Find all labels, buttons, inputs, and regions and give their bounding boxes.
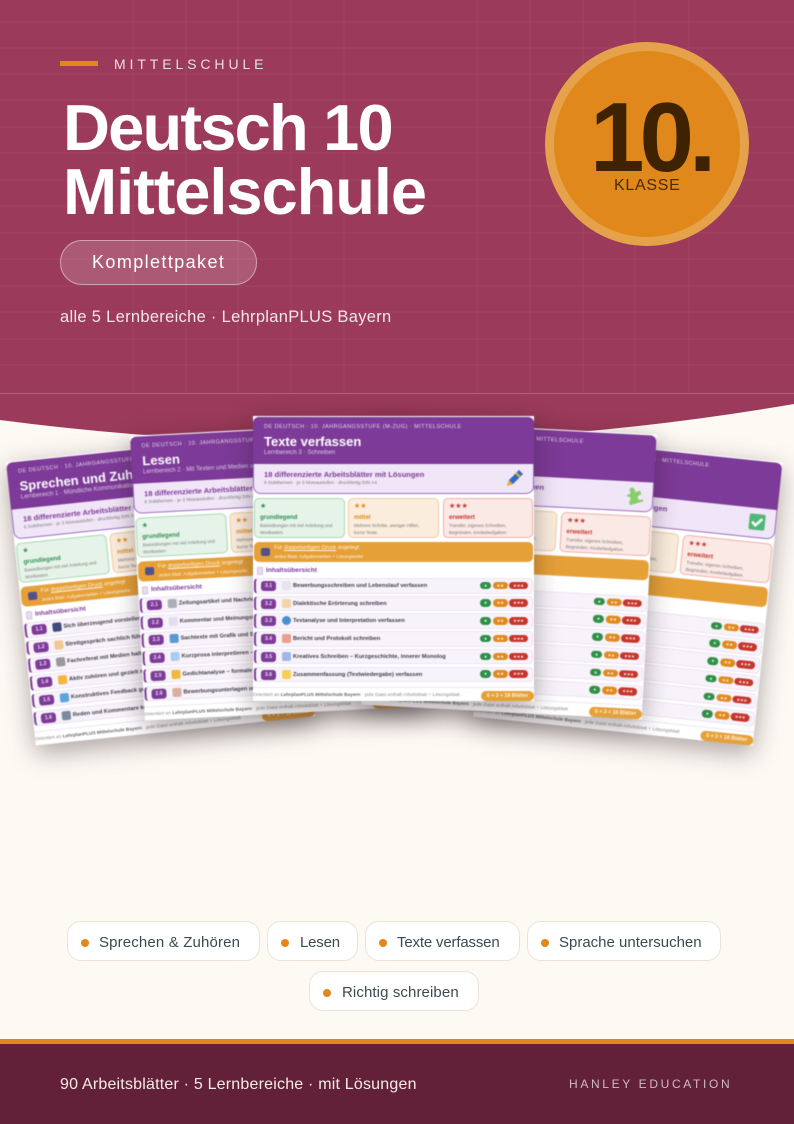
worksheet card 4: Sprache untersuchen: 6 Subthemen · je 3 Niveaustufen · druckfertig DIN A4 <box>384 486 497 497</box>
worksheet card 1: Sprechen und Zuhören: 1.1 <box>35 626 43 633</box>
worksheet card 5: Richtig schreiben: ★★ <box>721 677 729 682</box>
worksheet card 5: Richtig schreiben <box>473 433 782 745</box>
topic 3.6 <box>254 666 533 682</box>
worksheet card 5: Richtig schreiben: grundlegend <box>498 531 536 542</box>
worksheet card 1: Sprechen und Zuhören: Wortkasten. <box>25 572 49 579</box>
worksheet card 1: Sprechen und Zuhören: Fachreferat mit Medien halten <box>67 651 149 665</box>
topic 3.5: ★ <box>484 654 487 659</box>
topic 3.4: 3.4 <box>265 636 272 642</box>
topic 3.6: 3.6 <box>265 672 272 678</box>
worksheet card 4: Sprache untersuchen: ★★★ <box>623 689 634 694</box>
footer summary: 90 Arbeitsblätter · 5 Lernbereiche · mit Lösungen <box>60 1076 417 1093</box>
worksheet card 2: Lesen: 18 differenzierte Arbeitsblätter mit Lösungen <box>144 481 304 498</box>
worksheet card 5: Richtig schreiben: 5.3 <box>493 635 500 642</box>
eyebrow label: MITTELSCHULE <box>114 56 267 72</box>
worksheet card 1: Sprechen und Zuhören: 1.4 <box>41 679 49 686</box>
topic pill: Richtig schreiben <box>309 971 479 1011</box>
worksheet card 4: Sprache untersuchen: ★ <box>597 617 601 622</box>
worksheet card 4: Sprache untersuchen: ★ <box>598 599 602 604</box>
worksheet card 2: Lesen: 2.1 <box>151 602 158 608</box>
grade circle <box>545 42 749 246</box>
worksheet card 1: Sprechen und Zuhören: 1.3 <box>39 661 47 668</box>
worksheet card 4: Sprache untersuchen: ★★ <box>607 670 614 676</box>
worksheet card 1: Sprechen und Zuhören: Reden und Kommentare kritisch bewerten <box>72 700 188 718</box>
worksheet card 1: Sprechen und Zuhören: grundlegend <box>23 555 61 566</box>
level: grundlegend <box>254 498 345 538</box>
worksheet card 4: Sprache untersuchen: 4.4 <box>376 641 384 647</box>
worksheet card 4: Sprache untersuchen <box>361 420 657 720</box>
badge: Komplettpaket: Komplettpaket <box>92 252 225 272</box>
topic 3.6: ★ <box>484 671 487 676</box>
worksheet card 4: Sprache untersuchen: ★★★ <box>623 671 634 677</box>
worksheet card 5: Richtig schreiben: ★ <box>710 658 714 663</box>
footer bar <box>0 1039 794 1124</box>
topic 3.3: ★★★ <box>513 618 524 623</box>
topic 3.2: ★ <box>484 600 487 605</box>
worksheet card 1: Sprechen und Zuhören: 1.5 <box>43 696 50 703</box>
level: mittel: kurze Texte. <box>354 530 378 535</box>
worksheet card 2: Lesen: Lernbereich 2 · Mit Texten und Medien umgehen <box>143 461 276 475</box>
title: Deutsch 10 <box>63 91 392 164</box>
worksheet card 1: Sprechen und Zuhören: ★ <box>22 547 29 555</box>
worksheet card 2: Lesen: Orientiert an LehrplanPLUS Mittelschule Bayern · jede Datei enthält Arbeitsblatt + Lösungsblatt <box>144 702 351 718</box>
worksheet card 5: Richtig schreiben: ★★★ <box>736 696 747 702</box>
worksheet card 1: Sprechen und Zuhören: mittel <box>117 547 134 556</box>
level: erweitert: erweitert <box>449 514 475 521</box>
topic 3.1: ★★ <box>497 583 504 588</box>
worksheet card 2: Lesen: ★★ <box>235 517 248 525</box>
sheet count pill: 6 × 3 = 18 Blätter <box>487 693 528 699</box>
topic pill: Lesen: Lesen <box>300 934 340 951</box>
worksheet card 1: Sprechen und Zuhören: 6 × 3 = 18 Blätter <box>268 709 309 719</box>
worksheet card 5: Richtig schreiben: ★ <box>500 520 507 527</box>
worksheet card 2: Lesen: Wortkasten. <box>143 548 167 554</box>
worksheet card 4: Sprache untersuchen: ★★★ <box>627 600 638 606</box>
worksheet card 5: Richtig schreiben: ★ <box>705 711 709 716</box>
level: grundlegend: grundlegend <box>260 514 297 521</box>
topic 3.2 <box>254 596 533 611</box>
worksheet card 2: Lesen: 6 × 3 = 18 Blätter <box>378 698 420 706</box>
worksheet card 5: Richtig schreiben: 5.1 <box>496 600 504 607</box>
worksheet card 4: Sprache untersuchen: ★ <box>378 508 385 515</box>
worksheet card 5: Richtig schreiben: Orientiert an LehrplanPLUS Mittelschule Bayern · jede Datei enthält Arbeitsblatt + Lösungsblatt <box>473 708 679 735</box>
worksheet card 2: Lesen: Jedes Blatt: Aufgabenseiten + Lösungsseite <box>158 568 248 577</box>
topic 3.6: ★★★ <box>513 671 524 676</box>
level: mittel: Mehrere Schritte, weniger Hilfen, <box>354 523 420 528</box>
topic 3.1: ★★★ <box>513 583 524 588</box>
worksheet card 5: Richtig schreiben: Groß- und Kleinschreibung – Regelkunde <box>520 638 634 656</box>
contents heading: Inhaltsübersicht <box>266 567 317 574</box>
worksheet card 5: Richtig schreiben: ★★★ <box>734 714 745 720</box>
worksheet card 2: Lesen: erweitert <box>331 522 357 531</box>
topic pill: Richtig schreiben: Richtig schreiben <box>342 984 459 1001</box>
worksheet card 2: Lesen: Inhaltsübersicht <box>151 583 202 593</box>
worksheet card 4: Sprache untersuchen: ★★ <box>609 635 616 640</box>
worksheet card 4: Sprache untersuchen: ★ <box>593 687 597 692</box>
topic 3.4: Bericht und Protokoll schreiben <box>293 636 380 642</box>
grade label: KLASSE <box>614 177 680 194</box>
worksheet card 1: Sprechen und Zuhören: 18 differenzierte Arbeitsblätter mit Lösungen <box>23 498 183 524</box>
worksheet card 1: Sprechen und Zuhören: Mehrere Schritte, weniger Hilfen, <box>118 551 183 563</box>
level: grundlegend: ★ <box>260 503 266 510</box>
worksheet card 5: Richtig schreiben: 5.6 <box>487 688 495 695</box>
worksheet card 4: Sprache untersuchen: ★★★ <box>567 517 586 525</box>
worksheet card 5: Richtig schreiben: ★ <box>712 640 716 646</box>
worksheet card 5: Richtig schreiben: ★ <box>708 675 713 681</box>
publisher: HANLEY EDUCATION <box>569 1077 732 1091</box>
level: mittel: ★★ <box>354 503 367 510</box>
worksheet card 1: Sprechen und Zuhören: kurze Texte. <box>118 562 143 569</box>
topic 3.5 <box>254 649 533 664</box>
topic 3.3: ★ <box>484 618 487 623</box>
worksheet card 1: Sprechen und Zuhören: 1.2 <box>37 644 45 650</box>
worksheet card 2: Lesen: ★ <box>142 522 148 530</box>
level: grundlegend: Wortkasten. <box>260 530 284 535</box>
worksheet card 5: Richtig schreiben: 5.2 <box>494 618 502 624</box>
worksheet card 2: Lesen: Bewerbungsunterlagen und Formulare <box>183 684 289 695</box>
worksheet card 5: Richtig schreiben: erweitert <box>686 551 713 560</box>
worksheet card 2: Lesen: Kurzprosa interpretieren – Kurzgeschichten <box>181 647 301 660</box>
worksheet card 5: Richtig schreiben: Lernbereich 5 · Rechtschreibung <box>509 467 599 483</box>
worksheet card 5: Richtig schreiben: mittel <box>592 541 609 549</box>
worksheet card 1: Sprechen und Zuhören: Jedes Blatt: Aufgabenseiten + Lösungsseite <box>41 587 131 602</box>
topic 3.2: 3.2 <box>265 601 272 607</box>
worksheet card 1: Sprechen und Zuhören: Inhaltsübersicht <box>35 605 86 618</box>
topic pill: Sprechen & Zuhören <box>67 921 260 961</box>
worksheet card 4: Sprache untersuchen: ★★★ <box>625 636 636 641</box>
worksheet card 4: Sprache untersuchen: Wortschatz und Fachsprache – Herkunft <box>405 642 515 654</box>
worksheet card 1: Sprechen und Zuhören: Sich überzeugend vorstellen <box>63 616 142 630</box>
worksheet card 5: Richtig schreiben: 6 Subthemen · je 3 Niveaustufen · druckfertig DIN A4 <box>506 498 619 515</box>
topic pill: Texte verfassen <box>365 921 520 961</box>
worksheet card 4: Sprache untersuchen: 4.1 <box>379 588 387 594</box>
topic 3.2: ★★ <box>497 600 504 605</box>
worksheet card 5: Richtig schreiben: ★★★ <box>738 678 749 685</box>
topic 3.3 <box>254 613 533 629</box>
worksheet card 2: Lesen: Für doppelseitigen Druck angelegt <box>158 559 243 570</box>
worksheet card 5: Richtig schreiben: ★ <box>714 623 718 628</box>
worksheet card 4: Sprache untersuchen: 4.2 <box>378 605 386 612</box>
topic 3.4: ★★★ <box>513 636 524 641</box>
worksheet card 4: Sprache untersuchen: 4.3 <box>377 623 385 629</box>
hero background <box>0 0 794 436</box>
print notice <box>254 542 533 562</box>
topic 3.2: ★★★ <box>513 600 524 605</box>
card footer: Orientiert an LehrplanPLUS Mittelschule Bayern · jede Datei enthält Arbeitsblatt + Lösungsblatt <box>253 693 460 698</box>
topic 3.5: Kreatives Schreiben – Kurzgeschichte, innerer Monolog <box>293 654 446 660</box>
worksheet card 1: Sprechen und Zuhören: Konstruktives Feedback geben <box>71 685 156 700</box>
worksheet card 2: Lesen: Gedichtanalyse – formale Mittel <box>182 667 269 677</box>
topic 3.5: 3.5 <box>265 654 272 660</box>
worksheet card 2: Lesen: 2.2 <box>152 619 159 626</box>
card summary box: 6 Subthemen · je 3 Niveaustufen · druckfertig DIN A4 <box>264 481 377 486</box>
accent bar <box>60 61 98 66</box>
worksheet card 1: Sprechen und Zuhören: Lernbereich 1 · Mündliche Kommunikation <box>20 482 136 501</box>
topic 3.3: Textanalyse und Interpretation verfassen <box>293 618 405 624</box>
worksheet card 4: Sprache untersuchen: DE DEUTSCH · 10. JAHRGANGSSTUFE (M-ZUG) · MITTELSCHULE <box>387 429 584 445</box>
card title: Texte verfassen <box>264 434 361 449</box>
level: erweitert: ★★★ <box>449 503 468 510</box>
worksheet card 2: Lesen: grundlegend <box>142 532 180 540</box>
worksheet card 4: Sprache untersuchen: ★ <box>595 652 599 657</box>
topic 3.1: ★ <box>484 583 487 588</box>
card summary box: 18 differenzierte Arbeitsblätter mit Lösungen <box>264 470 424 479</box>
worksheet card 5: Richtig schreiben: 18 differenzierte Arbeitsblätter mit Lösungen <box>507 487 667 513</box>
worksheet card 4: Sprache untersuchen: erweitert <box>567 528 593 537</box>
worksheet card 2: Lesen: Kommentar und Meinungstexte verstehen <box>180 612 294 624</box>
worksheet card 1: Sprechen und Zuhören: 1.6 <box>45 714 52 721</box>
worksheet card 2: Lesen: 2.3 <box>152 637 160 643</box>
worksheet card 5: Richtig schreiben: ★★ <box>593 530 606 538</box>
worksheet card 4: Sprache untersuchen: 4.5 <box>376 658 383 665</box>
worksheet card 4: Sprache untersuchen: ★★ <box>608 653 615 658</box>
topic pill: Lesen <box>267 921 358 961</box>
worksheet card 5: Richtig schreiben: 5.4 <box>491 653 498 659</box>
worksheet card 5: Richtig schreiben: ★★ <box>725 642 733 647</box>
worksheet card 5: Richtig schreiben: 6 × 3 = 18 Blätter <box>706 733 747 743</box>
card header <box>253 417 534 464</box>
worksheet card 4: Sprache untersuchen: mittel <box>472 523 489 531</box>
worksheet card 4: Sprache untersuchen: 4.6 <box>375 676 382 682</box>
worksheet card 2: Lesen: kurze Texte. <box>237 543 261 549</box>
topic 3.2: Dialektische Erörterung schreiben <box>293 601 387 607</box>
level: mittel: mittel <box>354 514 371 521</box>
worksheet card 2: Lesen: 2.6 <box>155 690 163 697</box>
worksheet card 2: Lesen: ★★★ <box>330 512 349 520</box>
worksheet card 1: Sprechen und Zuhören: 6 Subthemen · je 3 Niveaustufen · druckfertig DIN A4 <box>24 514 137 530</box>
worksheet card 4: Sprache untersuchen: Mehrere Schritte, weniger Hilfen, <box>471 532 537 541</box>
worksheet card 1: Sprechen und Zuhören: ★★★ <box>210 526 229 535</box>
worksheet card 1: Sprechen und Zuhören: Streitgespräch sachlich führen <box>65 633 150 647</box>
worksheet card 1: Sprechen und Zuhören: erweitert <box>211 536 238 546</box>
subtitle: alle 5 Lernbereiche · LehrplanPLUS Bayern <box>60 308 392 326</box>
worksheet card 5: Richtig schreiben: ★★★ <box>740 661 751 667</box>
topic 3.6: ★★ <box>497 671 504 676</box>
topic pill: Texte verfassen: Texte verfassen <box>397 934 500 951</box>
worksheet card 4: Sprache untersuchen: ★ <box>594 670 598 675</box>
worksheet card 4: Sprache untersuchen: Begründen, Knobelaufgaben. <box>566 544 625 552</box>
level: erweitert: Begründen, Knobelaufgaben. <box>449 530 508 535</box>
worksheet card 2: Lesen <box>130 421 426 721</box>
worksheet card 5: Richtig schreiben: ★★ <box>727 624 735 630</box>
topic 3.1: Bewerbungsschreiben und Lebenslauf verfassen <box>293 583 427 589</box>
grade number: 10. <box>590 82 711 192</box>
worksheet card 4: Sprache untersuchen: kurze Texte. <box>471 539 495 545</box>
worksheet card 4: Sprache untersuchen: Transfer, eigenes Schreiben, <box>566 537 624 545</box>
worksheet card 4: Sprache untersuchen: 18 differenzierte Arbeitsblätter mit Lösungen <box>384 475 545 492</box>
worksheet card 5: Richtig schreiben: Begründen, Knobelaufgaben. <box>685 566 744 577</box>
worksheet card 2: Lesen: 2.4 <box>153 655 161 661</box>
topic 3.1 <box>254 578 533 594</box>
worksheet card 2: Lesen: 2.5 <box>154 672 162 679</box>
topic 3.3: 3.3 <box>265 618 272 624</box>
worksheet card 1: Sprechen und Zuhören: Begründen, Knobelaufgaben. <box>213 548 272 559</box>
worksheet card 1: Sprechen und Zuhören: Basisübungen mit viel Anleitung und <box>24 560 97 573</box>
worksheet card 4: Sprache untersuchen: ★★★ <box>626 618 637 624</box>
worksheet card 5: Richtig schreiben: ★★ <box>718 712 725 718</box>
worksheet card 5: Richtig schreiben: kurze Texte. <box>591 556 615 564</box>
card eyebrow: DE DEUTSCH · 10. JAHRGANGSSTUFE (M-ZUG) · MITTELSCHULE <box>264 424 462 430</box>
worksheet card 4: Sprache untersuchen: 6 × 3 = 18 Blätter <box>595 709 637 717</box>
title: Mittelschule <box>63 155 426 228</box>
worksheet card 5: Richtig schreiben: ★★★ <box>741 643 753 649</box>
worksheet card 4: Sprache untersuchen: ★★ <box>611 600 618 605</box>
worksheet card 2: Lesen: DE DEUTSCH · 10. JAHRGANGSSTUFE (M-ZUG) · MITTELSCHULE <box>141 433 339 449</box>
worksheet card 1: Sprechen und Zuhören: Orientiert an LehrplanPLUS Mittelschule Bayern · jede Datei enthält Arbeitsblatt + Lösungsblatt <box>35 716 241 742</box>
worksheet card 4: Sprache untersuchen: Sprache untersuchen <box>386 439 519 461</box>
worksheet card 5: Richtig schreiben: 5.5 <box>489 670 497 677</box>
worksheet card 4: Sprache untersuchen: Sprachliche Mittel untersuchen (Funktion) <box>405 625 521 637</box>
worksheet card 2: Lesen: 6 Subthemen · je 3 Niveaustufen · druckfertig DIN A4 <box>144 494 258 505</box>
topic 3.5: ★★ <box>497 654 504 659</box>
level: erweitert: Transfer, eigenes Schreiben, <box>449 523 506 528</box>
worksheet card 4: Sprache untersuchen: Orientiert an LehrplanPLUS Mittelschule Bayern · jede Datei enthält Arbeitsblatt + Lösungsblatt <box>362 697 568 713</box>
badge: Komplettpaket <box>60 240 257 285</box>
worksheet card 4: Sprache untersuchen: ★ <box>596 634 600 639</box>
topic 3.4 <box>254 631 533 647</box>
worksheet card 4: Sprache untersuchen: grundlegend <box>378 519 416 527</box>
topic 3.4: ★ <box>484 636 487 641</box>
worksheet card 2: Lesen: Basisübungen mit viel Anleitung und <box>143 539 215 547</box>
worksheet card 2: Lesen: mittel <box>236 528 253 536</box>
worksheet card 5: Richtig schreiben: ★ <box>707 693 711 698</box>
level: grundlegend: Basisübungen mit viel Anleitung und <box>260 523 332 528</box>
worksheet card 5: Richtig schreiben: DE DEUTSCH · 10. JAHRGANGSSTUFE (M-ZUG) · MITTELSCHULE <box>512 442 709 468</box>
worksheet card 5: Richtig schreiben: Mehrere Schritte, weniger Hilfen, <box>591 550 657 561</box>
topic 3.5: ★★★ <box>513 654 524 659</box>
level: erweitert <box>443 498 533 538</box>
worksheet card 1: Sprechen und Zuhören <box>6 433 315 745</box>
topic pill: Sprache untersuchen <box>527 921 721 961</box>
worksheet card 1: Sprechen und Zuhören: DE DEUTSCH · 10. JAHRGANGSSTUFE (M-ZUG) · MITTELSCHULE <box>18 448 215 475</box>
title <box>63 91 426 228</box>
topic 3.1: 3.1 <box>265 583 272 589</box>
worksheet card 4: Sprache untersuchen: Lernbereich 4 · Sprachgebrauch <box>385 454 474 465</box>
worksheet card 5: Richtig schreiben: ★★★ <box>743 626 754 632</box>
worksheet card 4: Sprache untersuchen: ★★ <box>472 512 485 520</box>
worksheet card 1: Sprechen und Zuhören: Transfer, eigenes Schreiben, <box>212 542 270 553</box>
worksheet card 5: Richtig schreiben: ★★★ <box>688 540 707 549</box>
worksheet card 5: Richtig schreiben: Richtig schreiben <box>510 452 620 478</box>
worksheet card 4: Sprache untersuchen: ★★★ <box>624 653 635 659</box>
worksheet card 1: Sprechen und Zuhören: ★★ <box>116 537 129 545</box>
topic pill: Sprache untersuchen: Sprache untersuchen <box>559 934 702 951</box>
worksheet card 2: Lesen: Mehrere Schritte, weniger Hilfen, <box>236 534 302 543</box>
worksheet card 2: Lesen: Lesen <box>142 451 180 468</box>
card summary box <box>253 464 534 494</box>
level: mittel <box>348 498 439 538</box>
worksheet card 1: Sprechen und Zuhören: Aktiv zuhören und gezielt nachfragen <box>69 666 171 683</box>
worksheet card 5: Richtig schreiben: ★★ <box>723 659 731 665</box>
topic 3.6: Zusammenfassung (Textwiedergabe) verfassen <box>293 672 422 678</box>
worksheet card 2: Lesen: Sachtexte mit Grafik und Statistik <box>181 631 272 642</box>
topic 3.3: ★★ <box>497 618 504 623</box>
worksheet card 5: Richtig schreiben: Transfer, eigenes Schreiben, <box>686 559 743 570</box>
worksheet card 5: Richtig schreiben: ★★ <box>719 694 727 700</box>
topic pill: Sprechen & Zuhören: Sprechen & Zuhören <box>99 934 240 951</box>
worksheet card 1: Sprechen und Zuhören: Sprechen und Zuhören <box>19 464 162 494</box>
worksheet card 3: Texte verfassen <box>253 416 534 701</box>
worksheet card 1: Sprechen und Zuhören: Für doppelseitigen Druck angelegt <box>40 579 126 594</box>
worksheet card 4: Sprache untersuchen: ★★ <box>606 688 614 693</box>
card subtitle: Lernbereich 3 · Schreiben <box>264 449 335 456</box>
topic 3.4: ★★ <box>497 636 504 641</box>
worksheet card 4: Sprache untersuchen: ★★ <box>610 617 617 623</box>
sheet count pill <box>481 691 534 701</box>
print notice: Für doppelseitigen Druck angelegt <box>274 545 359 551</box>
print notice: Jedes Blatt: Aufgabenseiten + Lösungsseite <box>274 554 363 558</box>
worksheet card 2: Lesen: Zeitungsartikel und Nachrichten analysieren <box>179 594 300 607</box>
